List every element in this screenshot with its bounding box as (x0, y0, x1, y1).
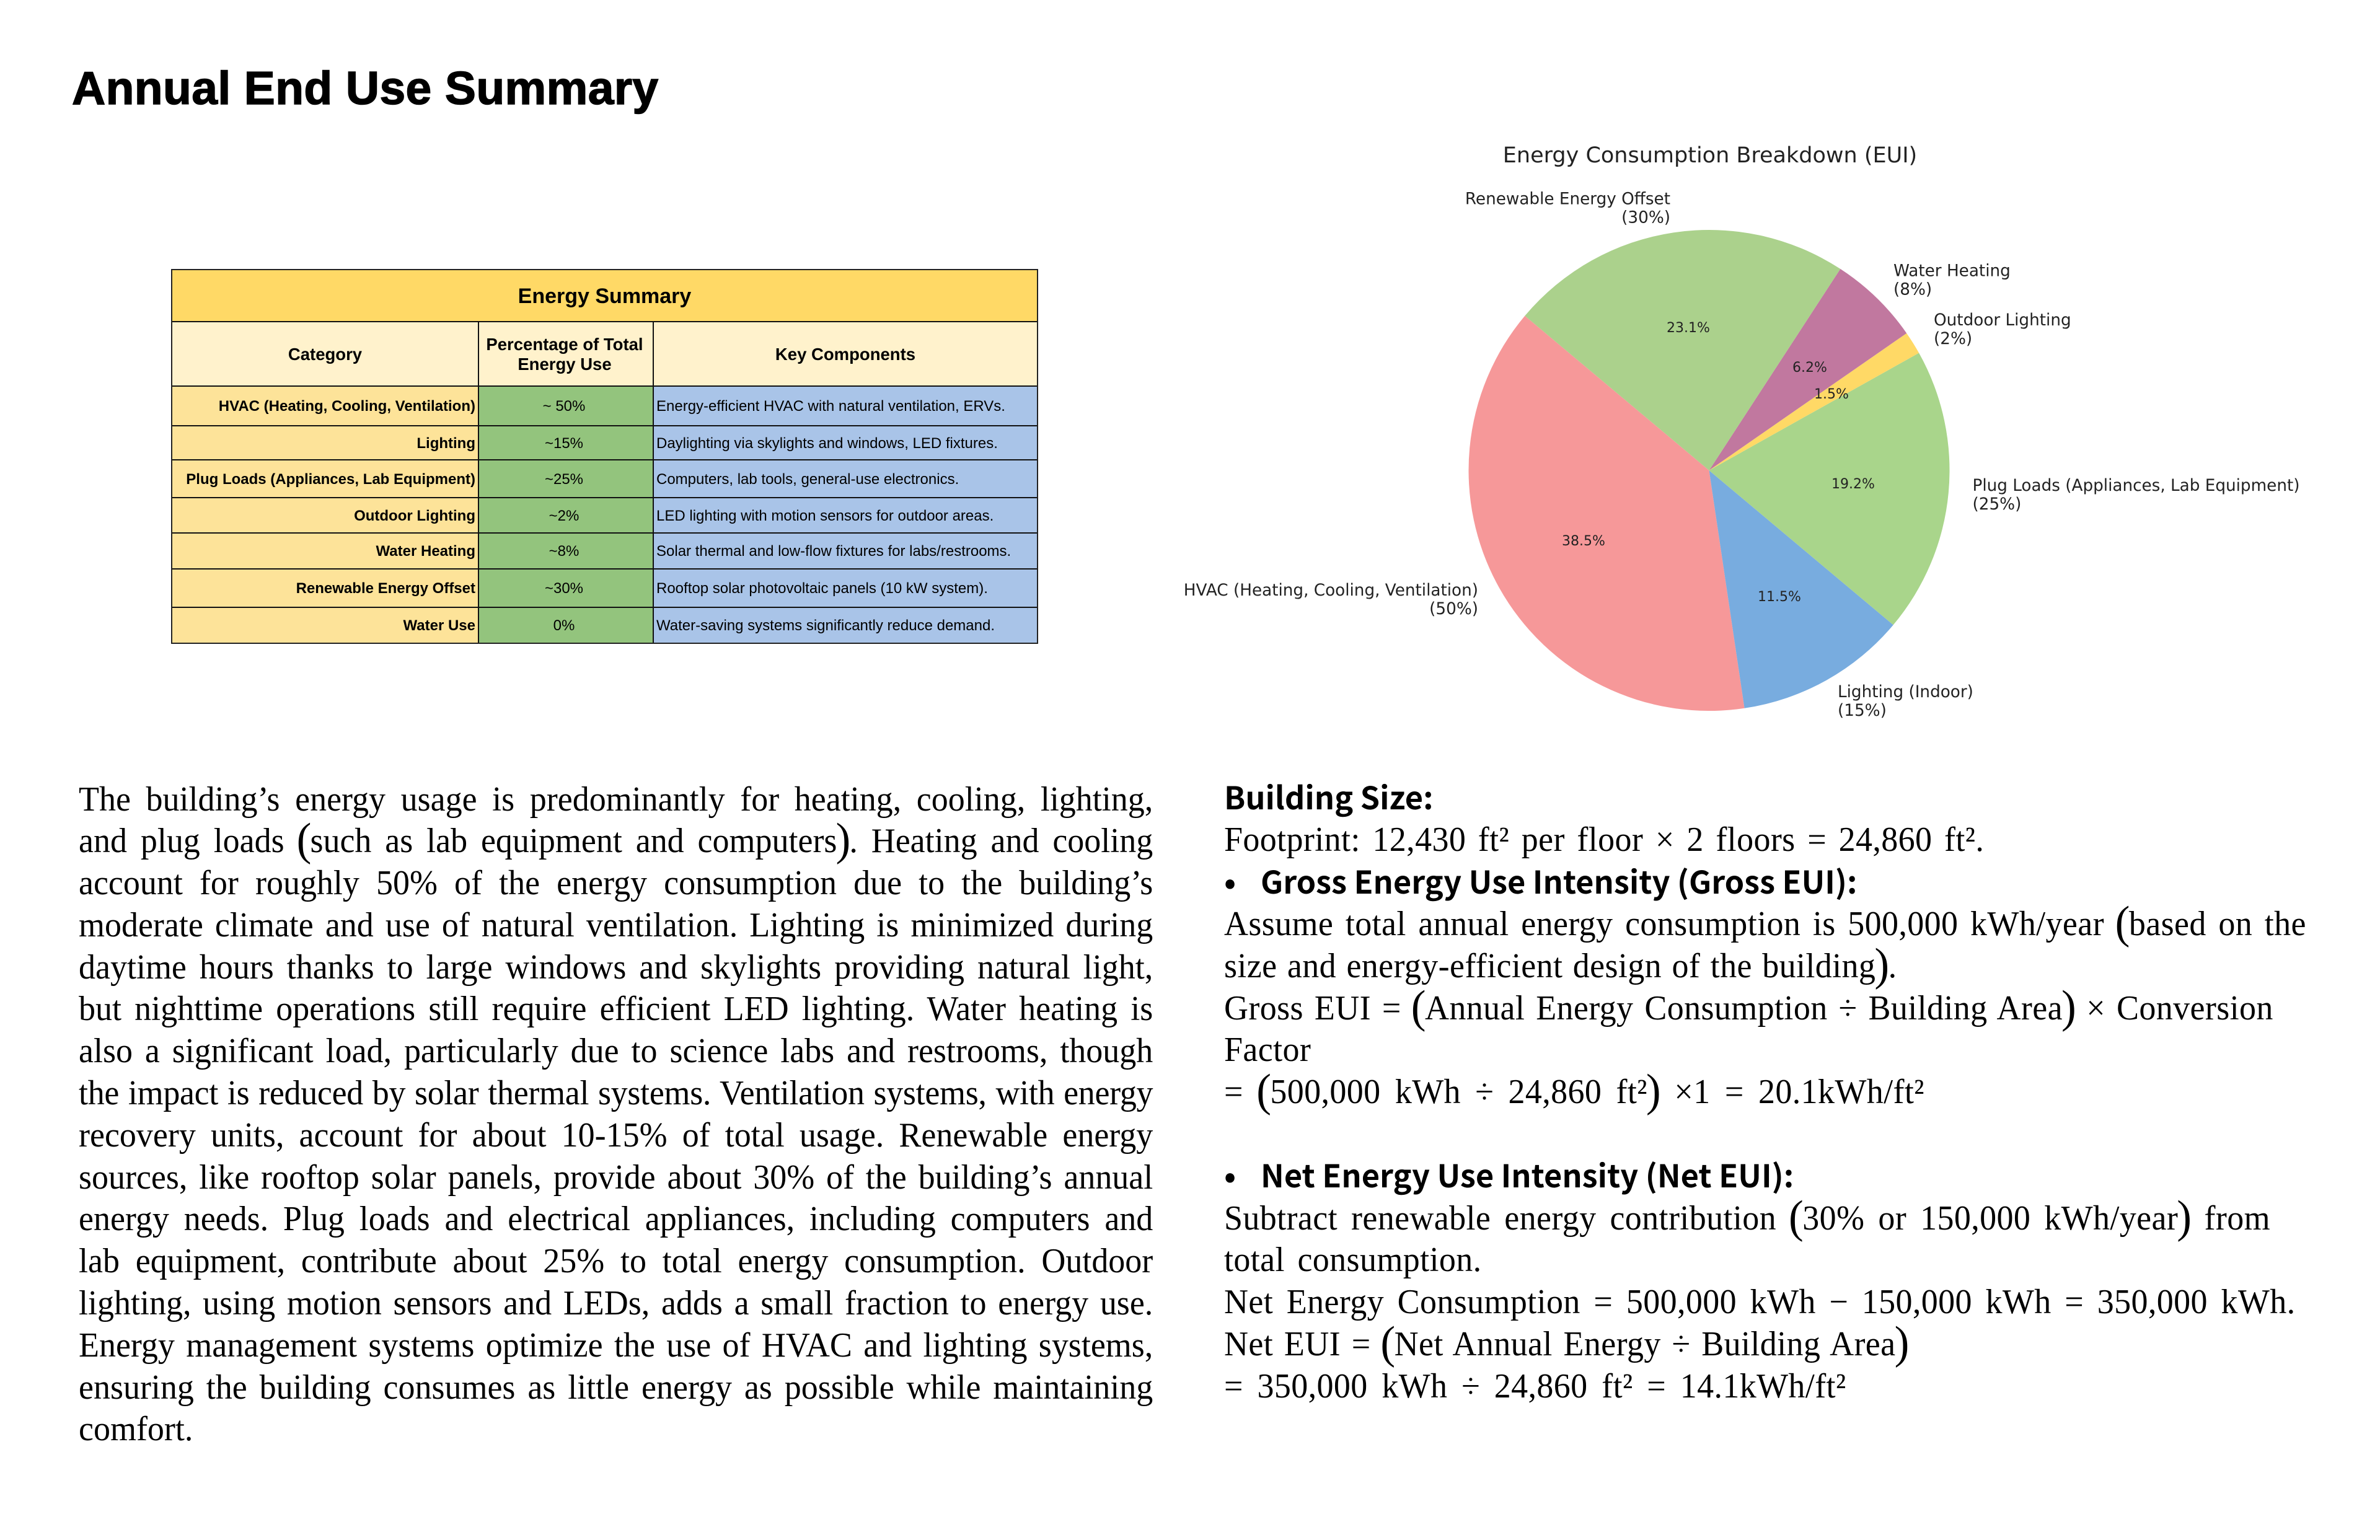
text block: energy usage narrative: lab equipment, contribute about 25% to total energy consumption. Outdoor (79, 1242, 1153, 1280)
label: Renewable Energy Offset: (30%) (1621, 208, 1670, 227)
label: Lighting: (15%) (1838, 702, 1887, 720)
row: Lighting percentage (479, 426, 654, 460)
slice: Water Heating (1709, 269, 1906, 470)
header: percentage: Percentage of Total (486, 335, 643, 354)
slice: Lighting (1709, 470, 1893, 708)
row: Outdoor lighting category: Outdoor Lighting (354, 507, 475, 524)
label: Renewable Energy Offset (1465, 190, 1670, 227)
row: Lighting percentage: ~15% (545, 435, 583, 451)
label: Plug Loads: (25%) (1972, 495, 2021, 514)
net EUI description: Subtract renewable energy contribution (30% or 150,000 kWh/year) from (1224, 1192, 2270, 1243)
row: HVAC components (654, 387, 1037, 426)
gross EUI result: = (500,000 kWh ÷ 24,860 ft²) ×1 = 20.1kWh/ft² (1224, 1065, 1924, 1116)
table title (172, 270, 1037, 322)
row: Renewable offset percentage (479, 570, 654, 608)
row: Plug loads components (654, 460, 1037, 498)
gross EUI assumption continued: size and energy-efficient design of the building). (1224, 939, 1897, 990)
percentages: 6.2% (1792, 360, 1827, 376)
text block: energy usage narrative: and plug loads (such as lab equipment and computers). Heating and cooling (79, 814, 1153, 865)
percentages: 23.1% (1667, 320, 1710, 336)
heading: gross EUI: Gross Energy Use Intensity (Gross EUI): (1261, 857, 1857, 903)
label: HVAC: HVAC (Heating, Cooling, Ventilation) (1184, 581, 1478, 600)
row: Water use category (172, 608, 479, 643)
row: Water heating percentage: ~8% (549, 543, 579, 560)
row: Lighting category (172, 426, 479, 460)
row: Renewable offset category (172, 570, 479, 608)
text block: energy usage narrative: the impact is reduced by solar thermal systems. Ventilation systems, with energy (79, 1074, 1153, 1112)
percentages (1562, 320, 1875, 605)
table title: Energy Summary (518, 284, 691, 307)
row: Water use components (654, 608, 1037, 643)
slice: Plug Loads (1709, 353, 1950, 625)
header: percentage (479, 322, 654, 387)
label: Outdoor Lighting: (2%) (1934, 330, 1972, 348)
row: Plug loads category: Plug Loads (Appliances, Lab Equipment) (186, 471, 475, 487)
row: Water heating components (654, 534, 1037, 570)
percentages: 11.5% (1758, 589, 1801, 605)
heading: net EUI: • (1224, 1151, 1236, 1197)
label: Water Heating: Water Heating (1893, 262, 2011, 280)
header: key components (654, 322, 1037, 387)
row: Renewable offset percentage: ~30% (545, 580, 583, 597)
row: Outdoor lighting category (172, 498, 479, 534)
chart title: Energy Consumption Breakdown (EUI) (1503, 143, 1917, 168)
net energy consumption: Net Energy Consumption = 500,000 kWh − 150,000 kWh = 350,000 kWh. (1224, 1283, 2295, 1321)
gross EUI assumption: Assume total annual energy consumption is 500,000 kWh/year (based on the (1224, 897, 2306, 948)
row: Renewable offset category: Renewable Energy Offset (296, 580, 475, 597)
row: Water heating components: Solar thermal and low-flow fixtures for labs/restrooms. (656, 543, 1011, 560)
slice: HVAC (1469, 316, 1745, 711)
text block: energy usage narrative: account for roughly 50% of the energy consumption due to the building’s (79, 864, 1153, 902)
row: HVAC category: HVAC (Heating, Cooling, Ventilation) (219, 398, 475, 415)
row: HVAC category (172, 387, 479, 426)
heading: gross EUI: • (1224, 857, 1236, 903)
text block: energy usage narrative: recovery units, account for about 10-15% of total usage. Renewable energy (79, 1116, 1153, 1155)
row: HVAC components: Energy-efficient HVAC with natural ventilation, ERVs. (656, 398, 1005, 415)
footprint line: Footprint: 12,430 ft² per floor × 2 floors = 24,860 ft². (1224, 821, 1984, 859)
label: Water Heating: (8%) (1893, 280, 1932, 299)
row: HVAC percentage (479, 387, 654, 426)
label: Lighting (1838, 683, 1973, 720)
row: Water use category: Water Use (403, 617, 475, 634)
row: Outdoor lighting percentage: ~2% (549, 507, 579, 524)
title: Annual End Use Summary (72, 62, 659, 114)
header: percentage: Energy Use (518, 354, 612, 374)
text block: energy usage narrative: ensuring the building consumes as little energy as possible while maintaining (79, 1368, 1153, 1407)
header: key components: Key Components (775, 345, 915, 364)
text block: energy usage narrative: moderate climate and use of natural ventilation. Lighting is minimized during (79, 906, 1153, 944)
text block: energy usage narrative: also a significant load, particularly due to science labs and restrooms, though (79, 1032, 1153, 1070)
row: Water use percentage (479, 608, 654, 643)
text block: EUI calculations (1224, 773, 2306, 1406)
text block: energy usage narrative: but nighttime operations still require efficient LED lighting. Water heating is (79, 990, 1153, 1028)
text block: energy usage narrative: sources, like rooftop solar panels, provide about 30% of the building’s annual (79, 1158, 1153, 1197)
label: Renewable Energy Offset: Renewable Energy Offset (1465, 190, 1670, 208)
label: Plug Loads (1972, 477, 2299, 514)
row: Water heating percentage (479, 534, 654, 570)
text block: energy usage narrative (79, 780, 1153, 1448)
slice: Renewable Energy Offset (1525, 230, 1840, 470)
heading: building size: Building Size: (1224, 773, 1433, 819)
row: Lighting category: Lighting (416, 435, 475, 451)
text block: energy usage narrative: comfort. (79, 1410, 193, 1448)
row: Water heating category: Water Heating (376, 543, 475, 560)
text block: energy usage narrative: daytime hours thanks to large windows and skylights providing natural light, (79, 948, 1153, 987)
percentages: 1.5% (1814, 387, 1849, 402)
row: Renewable offset components (654, 570, 1037, 608)
row: Plug loads percentage (479, 460, 654, 498)
net EUI result: = 350,000 kWh ÷ 24,860 ft² = 14.1kWh/ft² (1224, 1367, 1846, 1406)
label: HVAC (1184, 581, 1478, 618)
label: Outdoor Lighting (1934, 311, 2071, 348)
label: Outdoor Lighting: Outdoor Lighting (1934, 311, 2071, 330)
text block: energy usage narrative: The building’s energy usage is predominantly for heating, cooling, lighting, (79, 780, 1153, 818)
row: Plug loads percentage: ~25% (545, 471, 583, 487)
percentages: 19.2% (1831, 477, 1875, 492)
slice: Outdoor Lighting (1709, 333, 1919, 470)
row: Plug loads components: Computers, lab tools, general-use electronics. (656, 471, 959, 487)
label: Lighting: Lighting (Indoor) (1838, 683, 1973, 702)
row: HVAC percentage: ~ 50% (543, 398, 585, 415)
table: energy summary (171, 269, 1038, 644)
label: HVAC: (50%) (1429, 600, 1478, 618)
row: Lighting components (654, 426, 1037, 460)
row: Outdoor lighting components: LED lighting with motion sensors for outdoor areas. (656, 507, 994, 524)
gross EUI formula: Gross EUI = (Annual Energy Consumption ÷ Building Area) × Conversion (1224, 982, 2273, 1032)
label: Water Heating (1893, 262, 2011, 299)
gross EUI formula continued: Factor (1224, 1031, 1311, 1069)
heading: net EUI: Net Energy Use Intensity (Net EUI): (1261, 1151, 1794, 1197)
text block: energy usage narrative: lighting, using motion sensors and LEDs, adds a small fraction to energy use. (79, 1284, 1153, 1322)
percentages: 38.5% (1562, 534, 1605, 549)
header: category (172, 322, 479, 387)
text block: energy usage narrative: energy needs. Plug loads and electrical appliances, including computers and (79, 1200, 1153, 1238)
row: Outdoor lighting percentage (479, 498, 654, 534)
text block: energy usage narrative: Energy management systems optimize the use of HVAC and lighting systems, (79, 1326, 1153, 1365)
header: category: Category (288, 345, 362, 364)
row: Lighting components: Daylighting via skylights and windows, LED fixtures. (656, 435, 998, 451)
row: Water use percentage: 0% (553, 617, 575, 634)
row: Outdoor lighting components (654, 498, 1037, 534)
net EUI description continued: total consumption. (1224, 1241, 1481, 1279)
row: Renewable offset components: Rooftop solar photovoltaic panels (10 kW system). (656, 580, 988, 597)
row: Water heating category (172, 534, 479, 570)
row: Plug loads category (172, 460, 479, 498)
net EUI formula: Net EUI = (Net Annual Energy ÷ Building Area) (1224, 1318, 1910, 1368)
label: Plug Loads: Plug Loads (Appliances, Lab Equipment) (1972, 477, 2299, 495)
row: Water use components: Water-saving systems significantly reduce demand. (656, 617, 995, 634)
